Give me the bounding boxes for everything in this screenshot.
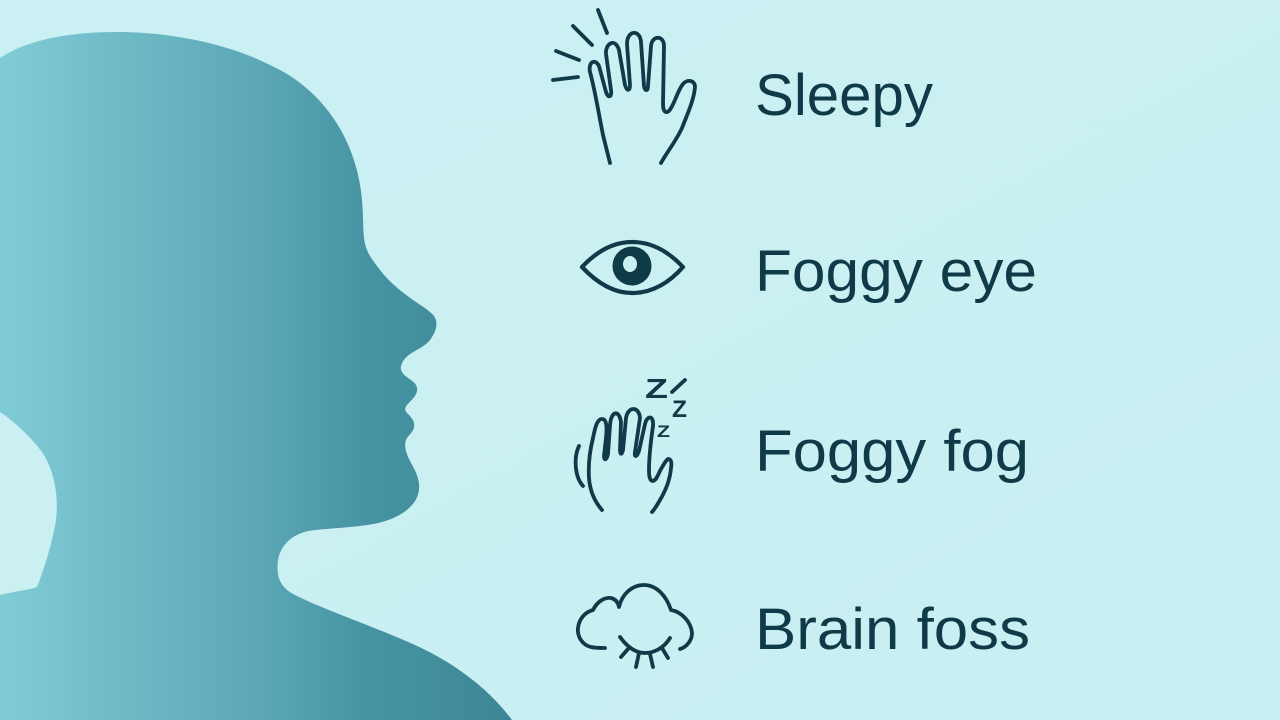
icon: waving hand with sleep letters: Z [657, 422, 670, 441]
label: Foggy eye: Foggy eye [755, 239, 1037, 304]
row: foggy fog [576, 373, 1029, 512]
label: Brain foss: Brain foss [755, 597, 1030, 662]
row: brain foss [578, 585, 1030, 667]
icon: waving hand with sleep letters: Z [672, 396, 687, 423]
icon: waving hand with sleep letters [576, 373, 687, 512]
icon: cloud with closed eye [578, 585, 692, 667]
head silhouette [0, 32, 512, 720]
label: Sleepy: Sleepy [755, 63, 933, 128]
icon: waving hand with sleep letters: Z [645, 373, 668, 404]
label: Foggy fog: Foggy fog [755, 419, 1029, 484]
row: sleepy [553, 10, 933, 163]
icon: raised hand with motion rays [553, 10, 695, 163]
icon: eye [582, 242, 683, 293]
row: foggy eye [582, 239, 1037, 304]
